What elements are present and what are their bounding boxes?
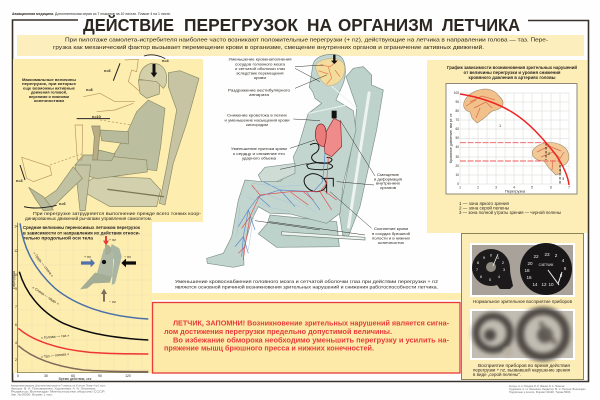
panel: instrument perception (462, 234, 584, 380)
force direction diagram (80, 236, 136, 302)
plot axis labels: 80 (455, 109, 459, 113)
right gauge: 4 (562, 258, 565, 263)
plot grid (460, 93, 569, 184)
right gauge: 12 (541, 282, 547, 287)
physiology labels: крови (254, 75, 266, 80)
plot zone numbers: 1 (499, 124, 501, 128)
right gauge: 10 (548, 282, 554, 287)
warning text: лом достижения перегрузки предельно допустимой величины. (164, 328, 392, 336)
plot axis labels: 40 (455, 145, 459, 149)
plot axis labels: 30 (455, 155, 459, 159)
brain: vision loss (532, 142, 569, 175)
fine capillaries (237, 183, 317, 250)
panel: tolerated overload chart (12, 222, 152, 381)
limits caption: перегрузок, при которых (22, 81, 77, 86)
right gauge: СЧЕТЧИК (539, 263, 553, 267)
right gauge: 20 (527, 261, 533, 266)
plot axis labels: 0 (457, 182, 459, 186)
plot axis labels: Перегрузка (505, 190, 526, 194)
intro text (53, 36, 548, 51)
intestines and organs (304, 143, 333, 193)
axis labels: 90 (98, 374, 102, 378)
warning text: Во избежание обморока необходимо уменьшить перегрузку и усилить на- (173, 336, 450, 344)
plot axis labels: Кровяное давление, мм рт. ст. (449, 113, 453, 163)
left gauge: 5 (489, 277, 492, 282)
lung (323, 118, 342, 157)
physiology labels: внутренних (376, 180, 400, 186)
panel: vision impairment graph (427, 60, 587, 233)
physiology labels: полости и в нижних (372, 236, 410, 240)
graph heading: кровяного давления в артериях головы (468, 75, 556, 80)
title: ДЕЙСТВИЕ (83, 14, 174, 35)
blurred caption: в виде „серой пелены". (473, 372, 521, 377)
imprint: left: Авиационная медицина. Дополнительная серия из 7 плакатов, на 10 листах. Плакат 4 на 1 листе. (11, 384, 106, 388)
left gauge: 9 (483, 255, 486, 260)
overload coordination note: При перегрузке затрудняется выполнение прежде всего тонких коор- (33, 211, 202, 216)
source line: Авиационная медицина. Дополнительная серия из 7 плакатов на 10 листах. Плакат 4 на 1 листе. (12, 12, 171, 16)
plot axis labels: 70 (455, 118, 459, 122)
plot zone numbers: 3 (562, 177, 564, 181)
graph legend: 3 — зона полной утраты зрения — черной пелены (459, 210, 561, 215)
physiology labels: вследствие перемещения (236, 71, 284, 76)
physiology labels: Раздражение вестибулярного (228, 88, 290, 92)
axis labels: 10 (14, 273, 18, 277)
overload coordination note (25, 211, 202, 221)
plot axis labels: 5 (531, 186, 533, 190)
chart heading: Средние величины переносимых летчиком перегрузок (23, 225, 141, 231)
normal caption: Нормальное зрительное восприятие приборов (473, 299, 573, 304)
chart heading (23, 225, 141, 242)
movement limit labels: n=3 (16, 179, 23, 183)
curve labels: « Грудь — спина » (32, 251, 54, 278)
physiology labels: сосудов головного мозга (235, 61, 286, 66)
plot axis labels: 2 (477, 186, 479, 190)
axis labels: 6 (15, 323, 17, 327)
physiology labels: и деформация (374, 176, 402, 182)
right gauge (520, 243, 572, 295)
physiology labels (224, 56, 410, 245)
axis labels: 7 (15, 305, 17, 309)
imprint: right: Подписано к печати. Формат 60x90. Тираж 5000. (509, 390, 571, 394)
movement limit labels: n=4 (162, 59, 170, 63)
curve labels (31, 251, 69, 359)
overload curve (460, 94, 569, 185)
axis labels: 4 (15, 341, 17, 345)
graph legend (459, 201, 561, 215)
imprint: left: Авторы: В. А. Пономаренко, Художники: А. Н. Лисенков. (11, 386, 96, 390)
left gauge: 1 (497, 255, 500, 260)
title: НА (307, 15, 332, 35)
panel: pilot physiology illustration (175, 55, 439, 289)
limits caption: конечностями (34, 98, 65, 103)
plot zone numbers: 2 (548, 152, 550, 156)
plot axis labels: 6 (550, 186, 552, 190)
physiology labels: к сердцу и снижение его (233, 151, 285, 156)
graph heading: График зависимости возникновения зрительных нарушений (447, 64, 577, 70)
right gauge: 16 (526, 275, 532, 280)
axis labels: 0 (17, 374, 19, 378)
right gauge: 14 (532, 282, 538, 287)
physiology labels: Скопление крови (374, 226, 408, 231)
intro band (17, 35, 584, 56)
axis labels: Перегрузка (12, 271, 16, 289)
movement limit labels: n=6 (59, 202, 66, 206)
left gauge: 4 (498, 274, 501, 279)
curve labels: « Спина — грудь » (31, 285, 60, 306)
physiology labels: Снижение кровотока в легких (227, 112, 287, 118)
axis labels: 14 (14, 224, 18, 228)
movement limit labels: n=6 (104, 69, 111, 73)
physiology labels: конечностях (378, 240, 404, 245)
limits caption: еще возможны активные (23, 85, 76, 90)
axis labels: 12 (14, 249, 18, 253)
heart (315, 124, 326, 147)
title (83, 14, 520, 35)
limits caption: движения головой, (31, 90, 67, 95)
curves (17, 223, 148, 373)
plot axis labels: 90 (455, 100, 459, 104)
curve labels: « Таз — голова » (41, 352, 69, 359)
plot axis labels: 3 (495, 186, 497, 190)
right gauge: 22 (533, 254, 539, 259)
axis labels: Время действия, сек (59, 377, 92, 381)
plot axis labels: 10 (455, 173, 459, 177)
graph legend: 2 — зона серой пелены (459, 206, 509, 210)
axis labels: 9 (15, 287, 17, 291)
plot axis labels: 60 (455, 127, 459, 131)
right gauge: 2 (555, 253, 558, 258)
title: ЛЕТЧИКА (442, 15, 520, 35)
left gauge: 6 (480, 274, 483, 279)
axis labels: 30 (44, 374, 48, 378)
plot axis labels: 7 (568, 186, 570, 190)
title: ОРГАНИЗМ (338, 15, 433, 35)
vision conclusion text: является основной причиной возникновения зрительных нарушений и снижения работоспособности летчика. (175, 284, 438, 290)
callout: pilot warning (152, 293, 461, 373)
left gauge: 0 (490, 252, 493, 258)
imprint: left: Зак. № 00000. Формат 1 лист. (11, 392, 53, 396)
left gauge: 7 (476, 267, 479, 272)
right gauge: 18 (524, 268, 530, 273)
physiology labels: кислородом (246, 122, 268, 127)
force labels: + nz (109, 238, 116, 242)
movement limit labels: n=10 (92, 115, 101, 119)
axis labels: 120 (125, 374, 131, 378)
vision conclusion text (175, 278, 439, 290)
photo: blurred instruments (470, 309, 575, 360)
warning text (164, 320, 450, 352)
plot axis labels: 20 (455, 164, 459, 168)
warning text: пряжение мышц брюшного пресса и нижних конечностей. (164, 344, 374, 352)
physiology labels: аппарата (249, 92, 270, 97)
intro text: При пилотаже самолета-истребителя наиболее часто возникают положительные перегрузки (+ nz), действующие на летчика в направлении голова — таз. Пере- (65, 36, 548, 44)
force labels: + nx (84, 255, 91, 259)
limits caption: Максимальные величины (22, 77, 77, 82)
curve labels: « Голова — таз » (41, 334, 69, 340)
axis labels (12, 224, 131, 381)
plot axis labels: 50 (455, 136, 459, 140)
brain: normal vision (464, 89, 503, 123)
chart heading: тельно продольной оси тела (23, 234, 93, 242)
imprint: left: Редактор: Воениздат Министерства обороны СССР. (11, 390, 105, 394)
physiology labels: Уменьшение кровенаполнения (228, 56, 292, 62)
physiology labels: органов (380, 185, 396, 190)
force labels: − nx (124, 255, 131, 259)
leader lines (255, 65, 375, 235)
threshold lines (460, 143, 560, 184)
photo: normal instruments (470, 243, 575, 297)
pilot in seat illustration (20, 55, 199, 211)
movement limit labels: n=8 (86, 88, 93, 92)
warning text: ЛЕТЧИК, ЗАПОМНИ! Возникновение зрительных нарушений является сигна- (173, 320, 450, 328)
force labels: − nz (109, 300, 116, 304)
plot axis labels: 4 (513, 186, 515, 190)
overload coordination note: динированных движений рычагами управления самолетом. (25, 216, 152, 221)
panel: pilot movement limits (13, 55, 203, 222)
graph legend: 1 — зона яркого зрения (459, 201, 509, 206)
chart grid (17, 222, 150, 372)
physiology labels: в сосудах брюшной (372, 231, 410, 236)
movement limit labels (16, 59, 170, 206)
physiology labels: ударного объема (242, 156, 277, 160)
left gauge: 2 (502, 260, 505, 265)
graph heading: от величины перегрузки и уровня снижения (464, 70, 561, 75)
chart heading: в зависимости от направления их действия относи- (23, 230, 140, 236)
left gauge: 3 (503, 267, 506, 272)
blurred caption: Восприятие приборов во время действия (478, 363, 570, 368)
seated pilot with circulatory system (207, 55, 383, 267)
physiology labels: Уменьшение притока крови (231, 146, 287, 151)
limits caption (22, 77, 77, 103)
vision conclusion text: Уменьшение кровоснабжения головного мозга и сетчатой оболочки глаз при действии перегрузки + nz (175, 278, 439, 284)
force labels (84, 238, 131, 304)
physiology labels: Смещение (377, 172, 399, 177)
plot axis labels: 1 (459, 186, 461, 190)
blue veins (235, 153, 325, 257)
plot zone numbers (499, 124, 564, 181)
red arteries (238, 157, 337, 260)
axis labels: 2 (15, 358, 17, 362)
imprint: right: Художник: А. Н. Лисенков. Редактор: М. С. Петров, Воениздат. (509, 387, 586, 391)
brain (315, 58, 345, 86)
imprint: right: Авторы: Н. А. Разумов, В. И. Иванов, В. А. Пименов. (509, 384, 565, 388)
right gauge: 8 (560, 273, 563, 278)
left gauge: 8 (477, 260, 480, 265)
title: ПЕРЕГРУЗОК (184, 15, 298, 35)
right gauge: 23 (544, 252, 550, 257)
intro text: грузка как механический фактор вызывает перемещение крови в организме, смещение внутренних органов и ограничение активных движений. (53, 44, 484, 51)
blurred caption (473, 363, 570, 377)
physiology labels: и сетчатой оболочки глаз (235, 66, 285, 71)
imprint: right (509, 384, 586, 394)
graph heading (447, 64, 577, 80)
limits caption: верхними и нижними (29, 94, 70, 99)
plot axis labels (449, 91, 570, 194)
right gauge: 6 (564, 266, 567, 271)
plot area (446, 84, 577, 194)
left gauge (472, 249, 513, 289)
physiology labels: и уменьшение насыщения крови (224, 118, 290, 122)
plot axis labels: 100 (454, 91, 459, 95)
imprint: left (11, 384, 106, 396)
axis labels: 60 (71, 374, 75, 378)
blurred caption: перегрузки + nz, вызвавшей нарушение зрения (473, 368, 570, 372)
